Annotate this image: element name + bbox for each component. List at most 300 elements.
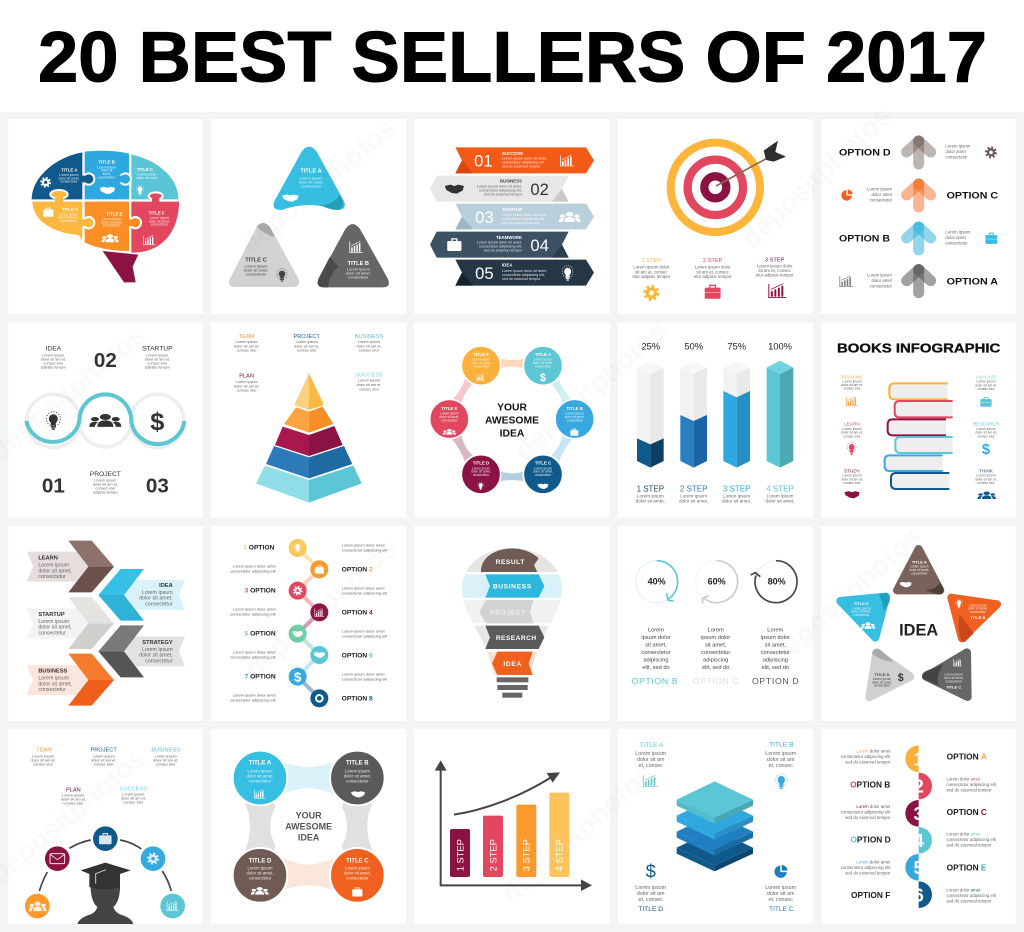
progress notes: sit amet, — [765, 642, 786, 648]
corner icons: $ — [646, 861, 656, 882]
zigzag notes: Lorem ipsum dolor amet — [342, 585, 386, 590]
pyramid notes: consec etur — [359, 349, 380, 353]
option labels — [839, 148, 998, 286]
chevron learn: Lorem ipsum — [38, 563, 70, 569]
graduate notes: Lorem ipsum — [155, 754, 177, 758]
axes — [435, 760, 592, 891]
title C circle: dolor sit amet, — [344, 871, 371, 876]
wave icons: $ — [150, 408, 164, 436]
wave labels: 02 — [94, 349, 117, 372]
circle 60% — [696, 561, 738, 604]
option notes: Lorem ipsum — [945, 143, 971, 148]
progress notes: elit, sed do — [702, 665, 729, 671]
title B circle: dolor sit amet, — [344, 773, 371, 778]
step notes: dolor sit amet, — [722, 499, 751, 504]
triangle C: Lorem ipsum — [945, 673, 963, 677]
ribbon 01 — [455, 147, 594, 173]
bar labels — [455, 839, 565, 871]
cycle circle labels: TITLE A — [535, 352, 552, 357]
wave labels — [40, 345, 173, 498]
book topic notes: Lorem ipsum — [842, 474, 862, 478]
book topic notes: dolor sit am et, — [841, 477, 863, 481]
progress notes: ipsum dolor — [641, 635, 671, 641]
panel: wave steps — [8, 323, 203, 518]
bulb ribbon labels — [490, 559, 536, 668]
step labels: 2 STEP — [680, 484, 707, 493]
wave labels: 01 — [42, 475, 65, 498]
arrow C — [907, 184, 931, 207]
zigzag option labels: 1 OPTION — [243, 545, 275, 552]
title C circle — [330, 848, 385, 903]
half circle digits: 5 — [913, 857, 924, 878]
piece labels: dolor sit amet, — [59, 176, 80, 180]
corner blocks — [638, 741, 794, 913]
right notes: Lorem dolor amet — [946, 832, 980, 837]
pyramid labels: SUCCESS — [355, 372, 383, 378]
option notes: Lorem ipsum — [867, 186, 892, 191]
corner icons — [643, 774, 788, 882]
graduate notes: dolor sit am et, — [61, 798, 86, 802]
option notes: consectetur — [870, 198, 893, 203]
books heading: BOOKS INFOGRAPHIC — [837, 340, 1001, 355]
zigzag notes: consectetur adipiscing elit — [342, 590, 388, 595]
book topic notes: dolor sit am et, — [841, 383, 863, 387]
cycle circle labels: Lorem ipsum — [534, 466, 552, 470]
book topic notes: dolor sit am et, — [975, 431, 997, 435]
circle 40%: 40% — [648, 576, 666, 586]
step notes: Lorem ipsum — [723, 493, 750, 498]
corner blocks: TITLE D — [638, 906, 663, 913]
step 3: sit am et, consec — [758, 268, 792, 273]
column 25% — [637, 361, 664, 468]
wave labels: adipisic tempor — [40, 365, 67, 369]
triangle B: consectetur — [970, 610, 986, 614]
pyramid notes: consec etur — [237, 349, 257, 353]
step 1 — [632, 258, 671, 300]
cycle circle labels: dolor sit amet, — [565, 415, 585, 419]
ribbon 02: BUSINESS — [500, 179, 522, 184]
wave labels: consec etur — [43, 361, 64, 365]
title A circle — [233, 751, 287, 805]
graduate notes: consec etur — [33, 762, 54, 766]
cycle connectors — [438, 352, 586, 488]
book topic notes: Lorem ipsum — [842, 379, 862, 383]
zigzag notes: consectetur adipiscing elit — [230, 612, 277, 617]
chevron strategy: STRATEGY — [142, 640, 173, 646]
piece labels: consectetur — [60, 219, 78, 223]
column 100% — [767, 361, 793, 468]
progress notes: consectetur — [641, 650, 671, 656]
chevron startup: STARTUP — [38, 612, 65, 618]
corner notes: dolor sit am — [637, 891, 665, 897]
cycle circle labels: dolor sit amet, — [533, 470, 553, 474]
ribbon 01: SUCCESS — [502, 151, 523, 156]
triangle A: Lorem ipsum — [299, 175, 323, 180]
left notes: Lorem dolor amet — [856, 804, 890, 809]
chevron business: consectetur — [38, 687, 66, 693]
pyramid labels — [239, 334, 384, 380]
pyramid notes: consec etur — [297, 349, 317, 353]
chevron idea: dolor sit amet, — [139, 596, 173, 602]
pyramid notes: dolor sit am et, — [234, 344, 259, 348]
zigzag connectors — [298, 548, 319, 698]
cycle circle labels — [439, 352, 585, 477]
panel: idea triangles — [821, 526, 1016, 721]
book topic notes: Lorem ipsum — [976, 474, 996, 478]
book topic notes: consec etur — [977, 434, 995, 438]
arrow A — [907, 270, 931, 293]
option titles: OPTION D — [850, 835, 891, 845]
ribbon 04: consectetur adipiscing elit, — [479, 245, 522, 249]
panel: four circle cycle — [211, 729, 406, 924]
zigzag option labels: OPTION 6 — [342, 652, 373, 659]
triangle D: $ — [898, 672, 904, 684]
zigzag option labels: 3 OPTION — [245, 588, 276, 595]
wave icons — [46, 408, 164, 436]
piece labels: Lorem ipsum — [150, 216, 169, 220]
chevron idea: consectetur — [145, 601, 173, 607]
corner notes: et, consec — [769, 763, 793, 769]
icons: brain pieces — [41, 178, 155, 245]
panel: growth chart — [414, 729, 610, 924]
pyramid notes: Lorem ipsum — [358, 379, 380, 383]
percent labels — [641, 342, 792, 352]
left notes: sed do eiusmod tempor — [845, 815, 891, 820]
book topic notes: dolor sit am et, — [841, 431, 863, 435]
triangle B: TITLE B — [348, 261, 369, 267]
percent labels: 50% — [684, 342, 703, 352]
graduate notes: consec etur — [156, 762, 176, 766]
half circle digits: 4 — [913, 830, 924, 851]
ribbon 03: consectetur adipiscing elit, — [502, 217, 545, 221]
chevron strategy: consectetur — [145, 658, 173, 664]
pyramid notes — [234, 340, 382, 393]
corner notes: et, consec — [769, 897, 793, 903]
wave labels: adipisic tempor — [144, 365, 171, 369]
title C circle: TITLE C — [346, 858, 369, 864]
book topic notes: Lorem ipsum — [976, 427, 996, 431]
option labels: OPTION A — [947, 276, 998, 286]
pyramid notes: Lorem ipsum — [236, 380, 258, 384]
zigzag option labels: OPTION 8 — [342, 696, 373, 703]
pyramid notes: consec etur — [237, 389, 257, 393]
wave labels: 03 — [146, 475, 169, 498]
book topic notes: Lorem ipsum — [842, 427, 862, 431]
watermark: depositphotos — [735, 100, 897, 254]
chevron business — [27, 654, 114, 706]
bars — [450, 793, 569, 877]
step notes: dolor sit amet, — [679, 499, 708, 504]
title A circle: Lorem ipsum — [247, 768, 273, 773]
chevron startup: Lorem ipsum — [38, 619, 70, 625]
step 2: 2 STEP — [703, 258, 723, 264]
panel: graduate — [8, 729, 203, 924]
step 3: etur adipisic tempor — [756, 273, 794, 278]
zigzag option labels: 7 OPTION — [245, 674, 276, 681]
book topic notes: consec etur — [843, 387, 861, 391]
chevron startup: consectetur — [38, 630, 66, 636]
option labels: OPTION B — [839, 233, 890, 243]
piece labels: Lorem ipsum — [102, 217, 122, 221]
option notes: Lorem ipsum — [867, 272, 892, 277]
pyramid labels: PLAN — [239, 374, 254, 380]
zigzag notes: Lorem ipsum dolor amet — [342, 671, 386, 676]
triangle C — [229, 223, 299, 287]
triangle D: TITLE D — [874, 672, 890, 677]
graduate labels: TEAM — [36, 748, 52, 754]
trend arrow — [454, 772, 560, 815]
cycle circle labels: Lorem ipsum — [566, 412, 584, 416]
zigzag nodes — [289, 539, 328, 707]
cycle circle labels: consectetur — [566, 418, 583, 422]
half circle digits: 3 — [913, 803, 924, 824]
cycle circle labels: Lorem ipsum — [440, 412, 459, 416]
piece labels: dolor sit — [101, 169, 113, 173]
piece labels: dolor sit amet, — [149, 219, 170, 223]
title B circle: TITLE B — [346, 761, 369, 767]
cycle circle labels: TITLE C — [535, 461, 551, 466]
piece labels: TITLE A — [61, 167, 78, 172]
graduate figure — [77, 863, 133, 924]
cycle circle labels: Lorem ipsum — [534, 358, 552, 362]
right notes: sed do eiusmod tempor — [946, 787, 992, 792]
progress notes: Lorem — [767, 627, 784, 633]
ribbon 04: sed do eiusmod tempor — [484, 249, 523, 253]
piece labels: TITLE F — [149, 210, 165, 215]
option titles: OPTION A — [947, 752, 987, 762]
column 75% — [723, 361, 750, 468]
progress notes: elit, sed do — [762, 665, 789, 671]
chevron idea: IDEA — [159, 583, 173, 589]
bulb tint bands — [460, 548, 563, 675]
step 3 — [756, 257, 794, 298]
piece labels: Lorem ipsum — [59, 173, 79, 177]
left notes: consectetur adipiscing elit — [841, 754, 891, 759]
title D circle: TITLE D — [249, 858, 272, 864]
progress notes: adipiscing — [763, 657, 788, 663]
cycle circle labels: dolor sit amet, — [533, 361, 553, 365]
panel: light bulb — [414, 526, 610, 721]
option notes: consectetur — [945, 155, 968, 160]
zigzag option labels: 5 OPTION — [245, 631, 276, 638]
pyramid notes: Lorem ipsum — [358, 340, 380, 344]
pyramid notes: dolor sit am et, — [356, 344, 382, 348]
half circle digits: 2 — [913, 776, 924, 797]
zigzag notes: consectetur adipiscing elit — [342, 676, 388, 681]
triangle D: consectetur — [874, 684, 890, 688]
watermark: depositphotos — [508, 314, 672, 466]
triangle B — [951, 598, 997, 642]
ribbon 03: Lorem ipsum dolor sit amet, — [502, 213, 547, 217]
title A circle: dolor sit amet, — [246, 773, 274, 778]
pyramid labels: BUSINESS — [355, 334, 384, 340]
option notes: dolor amet — [872, 278, 893, 283]
right notes: sed do eiusmod tempor — [946, 898, 992, 903]
cycle connectors — [245, 762, 373, 890]
option titles: OPTION E — [947, 862, 987, 872]
step 1: Lorem ipsum dolor — [633, 265, 670, 270]
ribbon 02: Lorem ipsum dolor sit amet, — [477, 185, 522, 189]
piece labels: TITLE E — [106, 211, 122, 216]
triangle C: consectetur — [945, 679, 962, 683]
panel: brain puzzle — [8, 119, 203, 314]
step 2: etur adipisic tempor — [694, 274, 732, 279]
corner notes: et, consec — [639, 897, 663, 903]
triangle A — [273, 147, 345, 210]
corner notes: dolor sit am — [767, 757, 795, 763]
left notes: Lorem dolor amet — [856, 859, 890, 864]
piece labels: TITLE C — [137, 167, 153, 172]
half circle digits: 6 — [913, 884, 924, 905]
bar labels: 4 STEP — [555, 839, 565, 871]
half circle digits: 1 — [913, 748, 924, 769]
title A circle: TITLE A — [249, 761, 272, 767]
ribbon 02: sed do eiusmod tempor — [484, 193, 523, 197]
arc nodes — [25, 826, 185, 918]
ribbon 03: 03 — [475, 208, 494, 227]
corner notes: dolor sit am — [637, 757, 665, 763]
bulb ribbons — [479, 548, 544, 675]
pyramid chart — [256, 373, 362, 503]
progress notes: adipiscing — [643, 657, 669, 663]
pyramid labels: PROJECT — [293, 334, 320, 340]
arrow B — [907, 227, 931, 250]
panel: six circle cycle — [414, 323, 610, 518]
triangle C: Lorem ipsum — [244, 263, 268, 268]
zigzag notes: Lorem ipsum dolor amet — [342, 543, 386, 548]
triangle E: dolor sit amet, — [851, 610, 871, 614]
corner blocks: TITLE B — [769, 741, 794, 748]
title B circle — [330, 751, 385, 805]
progress notes: consectetur — [701, 650, 730, 656]
right notes — [946, 776, 997, 903]
ribbon 05: sed do eiusmod tempor — [502, 277, 541, 281]
step notes: dolor sit amet, — [636, 499, 665, 504]
step notes: Lorem ipsum — [680, 493, 707, 498]
corner notes: dolor sit am — [767, 891, 795, 897]
half circles — [905, 745, 932, 908]
bulb ribbon labels: PROJECT — [490, 609, 525, 616]
panel: progress circles — [618, 526, 813, 721]
chevron strategy: dolor sit amet, — [139, 653, 173, 659]
title B circle: consectetur — [346, 778, 369, 783]
wave chart — [26, 394, 184, 448]
triangle B: Lorem ipsum — [969, 603, 987, 607]
graduate notes: consec etur — [123, 801, 144, 805]
triangle C: dolor sit amet, — [944, 676, 964, 680]
option labels: OPTION C — [947, 191, 998, 201]
graduate labels: PLAN — [66, 787, 81, 793]
zigzag nodes: $ — [294, 669, 302, 684]
cycle circle labels: consectetur — [441, 418, 457, 422]
bulb base — [497, 677, 528, 698]
arrow — [716, 141, 786, 186]
corner notes — [635, 751, 797, 903]
cycle circle labels: consectetur — [473, 364, 489, 368]
ribbon 04: 04 — [530, 236, 549, 255]
ribbon 01: sed do eiusmod tempor — [502, 164, 541, 168]
graduate labels: BUSINESS — [151, 748, 180, 754]
graduate notes: consec etur — [94, 762, 114, 766]
title D circle: dolor sit amet, — [246, 871, 274, 876]
graduate notes: Lorem ipsum — [62, 794, 84, 798]
step notes: dolor sit amet, — [765, 499, 795, 504]
title B circle: Lorem ipsum — [345, 768, 370, 773]
pyramid labels: TEAM — [239, 334, 255, 340]
step 1: etur adipisic tempor — [632, 274, 671, 279]
circle 60%: 60% — [708, 576, 726, 586]
left notes: consectetur adipiscing elit — [841, 809, 891, 814]
progress notes: ipsum dolor — [701, 635, 730, 641]
graduate labels: SUCCESS — [120, 786, 147, 792]
puzzle pieces — [32, 151, 179, 282]
progress options: OPTION D — [752, 676, 799, 686]
zigzag notes: consectetur adipiscing elit — [342, 633, 388, 638]
cycle circle labels: dolor sit amet, — [471, 470, 491, 474]
right notes: consectetur adipiscing elit — [946, 782, 997, 787]
piece labels: consectetur — [60, 180, 78, 184]
chevron startup: dolor sit amet, — [38, 625, 72, 631]
panel: layer stack — [618, 729, 813, 924]
circle 40% — [636, 561, 678, 603]
zigzag notes: consectetur adipiscing elit — [230, 697, 277, 702]
watermark: depositphotos — [238, 532, 402, 684]
option labels: OPTION D — [839, 148, 891, 158]
step 2 — [694, 258, 732, 299]
ribbon 04: TEAMWORK — [496, 235, 523, 240]
cycle circle labels: TITLE F — [473, 352, 489, 357]
zigzag notes: Lorem ipsum dolor amet — [233, 564, 277, 569]
zigzag notes — [230, 543, 388, 702]
option titles: OPTION B — [850, 779, 890, 789]
cycle circle labels: consectetur — [535, 364, 551, 368]
column 50% — [680, 361, 707, 468]
arrow D — [907, 141, 931, 164]
triangle D — [869, 649, 910, 697]
percent labels: 25% — [641, 342, 660, 352]
progress options: OPTION B — [632, 676, 678, 686]
step 2: Lorem ipsum dolor — [695, 265, 731, 270]
piece labels — [58, 159, 170, 228]
wave labels: consec etur — [95, 487, 116, 491]
bar labels: 1 STEP — [455, 839, 465, 871]
pyramid notes: Lorem ipsum — [236, 340, 258, 344]
left notes: Lorem dolor amet — [856, 749, 890, 754]
step notes: Lorem ipsum — [767, 493, 794, 498]
ribbon 04 — [430, 232, 569, 258]
option notes — [867, 143, 971, 289]
bulb ribbon labels: RESEARCH — [496, 635, 536, 642]
cycle circle labels: consectetur — [535, 473, 551, 477]
corner notes: Lorem ipsum — [635, 751, 667, 757]
wave labels: STARTUP — [142, 345, 173, 352]
cycle circle labels: dolor sit amet, — [439, 415, 459, 419]
ribbon 05: 05 — [475, 264, 494, 283]
left notes: consectetur adipiscing elit — [841, 865, 891, 870]
book topic labels — [841, 374, 999, 473]
chevron idea — [98, 569, 185, 621]
pyramid notes: dolor sit am et, — [356, 383, 382, 387]
cycle circle labels: Lorem ipsum — [472, 358, 490, 362]
cycle circle labels: Lorem ipsum — [472, 466, 490, 470]
center text: YOUR — [296, 811, 322, 821]
ribbon 05: Lorem ipsum dolor sit amet, — [502, 269, 547, 273]
progress notes: Lorem — [708, 627, 724, 633]
cycle icons — [443, 372, 578, 490]
cycle circle labels: TITLE E — [441, 406, 457, 411]
book stack — [885, 383, 953, 489]
cycle center text: AWESOME — [485, 415, 539, 426]
